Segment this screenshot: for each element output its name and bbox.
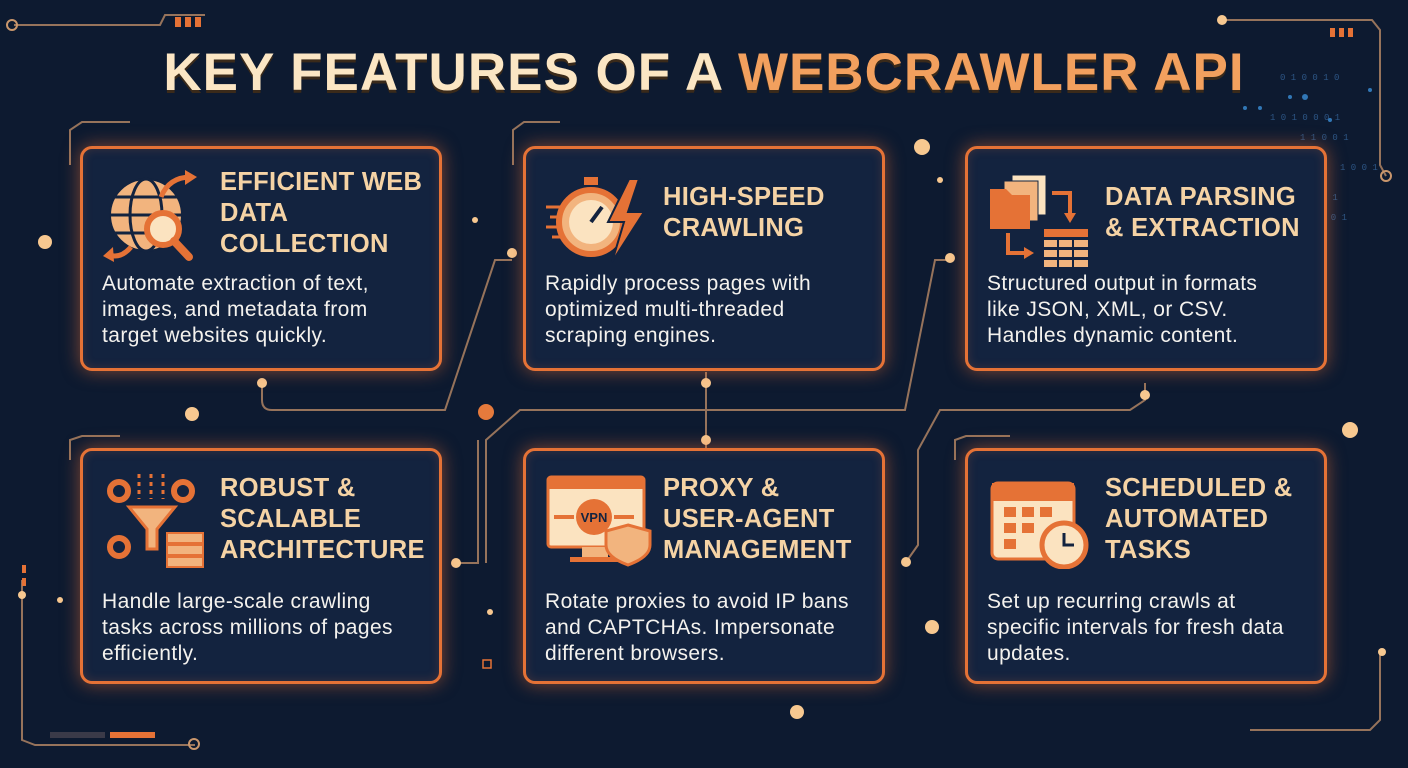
heading: & EXTRACTION [1105,214,1300,242]
text [545,590,849,665]
heading: USER-AGENT [663,505,835,533]
text: different browsers. [545,642,725,665]
text [102,590,393,665]
heading: SCHEDULED & [1105,474,1292,502]
heading [663,474,852,564]
text: updates. [987,642,1071,665]
background circuit lines: 0 1 0 0 1 0 [1280,73,1339,83]
heading [663,183,825,242]
heading [1105,474,1292,564]
heading: CRAWLING [663,214,804,242]
text [545,272,811,347]
panel: robust & scalable architecture [80,448,442,684]
heading: PROXY & [663,474,779,502]
icon: globe with magnifier [103,170,197,262]
text: Rapidly process pages with [545,272,811,295]
heading: MANAGEMENT [663,536,852,564]
heading: TASKS [1105,536,1191,564]
text [987,272,1257,347]
title: KEY FEATURES OF A WEBCRAWLER API [163,43,1245,102]
icon: monitor VPN shield [546,476,652,567]
background circuit lines: 1 0 0 1 [1340,163,1378,173]
text [102,272,369,347]
heading [1105,183,1300,242]
panel: scheduled & automated tasks [965,448,1327,684]
icon: gears funnel servers [107,474,204,568]
text [987,590,1284,665]
text: optimized multi-threaded [545,298,785,321]
icon: monitor VPN shield: VPN [581,510,607,525]
heading: AUTOMATED [1105,505,1268,533]
background circuit lines: 1 0 1 0 0 0 1 [1270,113,1340,123]
text: tasks across millions of pages [102,616,393,639]
heading [220,474,425,564]
heading [220,168,422,258]
icon: stopwatch with lightning [546,177,642,257]
heading: EFFICIENT WEB [220,168,422,196]
text: Rotate proxies to avoid IP bans [545,590,849,613]
text: Handle large-scale crawling [102,590,371,613]
text: images, and metadata from [102,298,368,321]
text: target websites quickly. [102,324,327,347]
text: Set up recurring crawls at [987,590,1236,613]
panel: proxy & user-agent management [523,448,885,684]
background circuit lines: 0 1 0 1 [1300,193,1338,203]
heading: HIGH-SPEED [663,183,825,211]
heading: DATA [220,199,288,227]
panel: efficient web data collection [80,146,442,371]
panel: high-speed crawling [523,146,885,371]
panel: data parsing & extraction [965,146,1327,371]
background circuit lines: 1 1 0 0 1 [1300,133,1349,143]
icon: folders to table [990,176,1088,267]
text: like JSON, XML, or CSV. [987,298,1228,321]
text: and CAPTCHAs. Impersonate [545,616,835,639]
icon: calendar clock [990,482,1088,569]
text: specific intervals for fresh data [987,616,1284,639]
text: scraping engines. [545,324,716,347]
heading: DATA PARSING [1105,183,1296,211]
text: Automate extraction of text, [102,272,369,295]
background circuit lines: 1 0 1 [1320,213,1347,223]
heading: ROBUST & [220,474,356,502]
heading: COLLECTION [220,230,389,258]
text: Structured output in formats [987,272,1257,295]
text: Handles dynamic content. [987,324,1238,347]
text: efficiently. [102,642,198,665]
heading: ARCHITECTURE [220,536,425,564]
heading: SCALABLE [220,505,361,533]
